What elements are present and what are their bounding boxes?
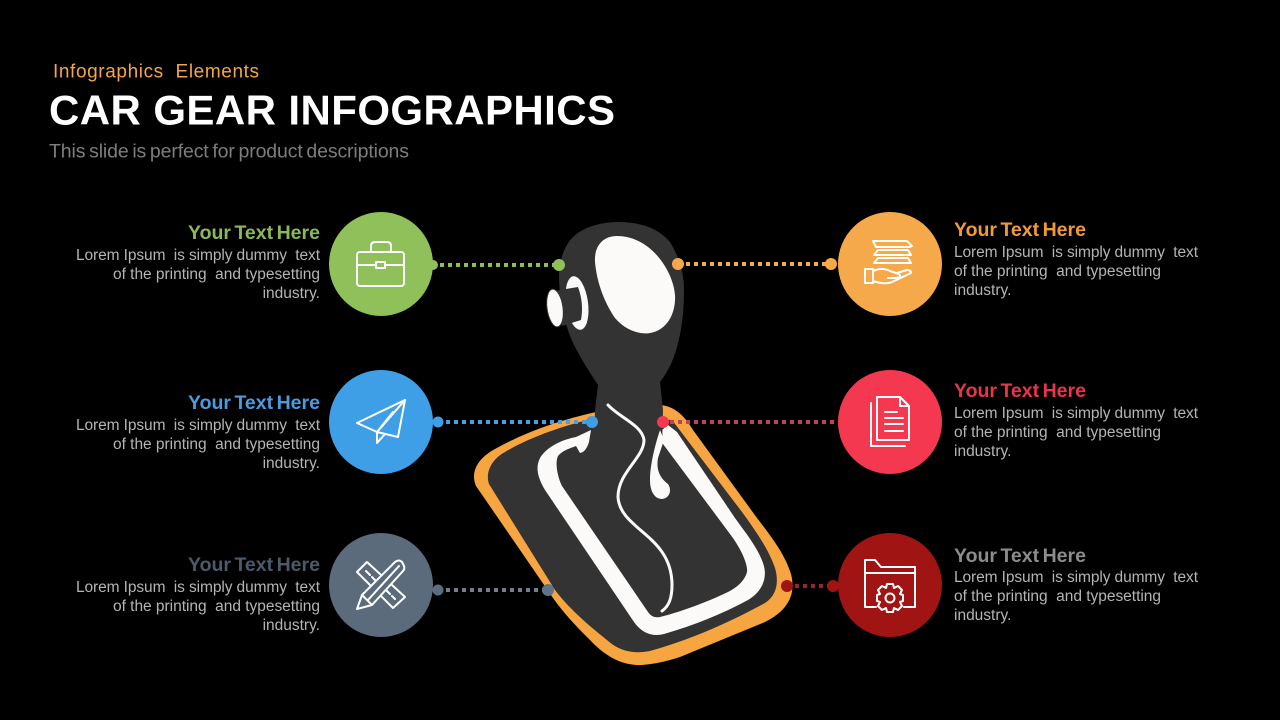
heading: Your Text Here xyxy=(188,392,320,414)
item: slate tools xyxy=(76,533,433,637)
body xyxy=(76,579,321,634)
side button face xyxy=(544,288,566,328)
circle xyxy=(838,212,942,316)
circle xyxy=(329,370,433,474)
item: orange hand xyxy=(838,212,1199,316)
body: industry. xyxy=(263,285,320,302)
icon: pencil and ruler xyxy=(357,560,405,609)
body xyxy=(76,417,321,472)
shifter base orange rim xyxy=(474,405,793,665)
subtitle: This slide is perfect for product descriptions xyxy=(49,140,409,162)
body xyxy=(954,569,1199,624)
heading: Your Text Here xyxy=(954,545,1086,567)
side button ring xyxy=(562,275,592,331)
body: industry. xyxy=(954,282,1011,299)
body: Lorem Ipsum is simply dummy text xyxy=(954,405,1199,422)
side button cap xyxy=(554,287,582,326)
circle xyxy=(329,212,433,316)
icon: briefcase xyxy=(357,242,404,286)
body xyxy=(954,405,1199,460)
gate serpentine line xyxy=(608,405,672,611)
body: of the printing and typesetting xyxy=(954,263,1161,280)
body: industry. xyxy=(954,607,1011,624)
header xyxy=(49,62,615,162)
body xyxy=(954,244,1199,299)
eyebrow: Infographics Elements xyxy=(53,62,259,82)
white gate track xyxy=(538,425,765,635)
heading: Your Text Here xyxy=(954,380,1086,402)
body: Lorem Ipsum is simply dummy text xyxy=(954,244,1199,261)
connector: dark red xyxy=(781,580,839,592)
shifter base dark plate xyxy=(488,418,777,652)
title: CAR GEAR INFOGRAPHICS xyxy=(49,86,615,134)
item: dark red folder xyxy=(838,533,1199,637)
body: of the printing and typesetting xyxy=(954,424,1161,441)
knob white highlight xyxy=(595,236,675,333)
heading: Your Text Here xyxy=(954,219,1086,241)
body: Lorem Ipsum is simply dummy text xyxy=(76,247,321,264)
gate drop shape xyxy=(650,430,670,499)
body: industry. xyxy=(954,443,1011,460)
body: of the printing and typesetting xyxy=(113,436,320,453)
body: Lorem Ipsum is simply dummy text xyxy=(954,569,1199,586)
connector: green xyxy=(428,259,565,271)
body xyxy=(76,247,321,302)
circle xyxy=(329,533,433,637)
icon: documents xyxy=(871,397,909,446)
connector: blue xyxy=(432,416,598,428)
icon: paper plane xyxy=(357,400,405,443)
circle xyxy=(838,533,942,637)
circle xyxy=(838,370,942,474)
item: green briefcase xyxy=(76,212,433,316)
body: of the printing and typesetting xyxy=(113,598,320,615)
item: red documents xyxy=(838,370,1199,474)
connector: orange xyxy=(672,258,837,270)
heading: Your Text Here xyxy=(188,222,320,244)
body: of the printing and typesetting xyxy=(954,588,1161,605)
connector: slate xyxy=(432,584,554,596)
connector: red xyxy=(657,416,838,428)
body: industry. xyxy=(263,617,320,634)
body: Lorem Ipsum is simply dummy text xyxy=(76,579,321,596)
gear shifter illustration xyxy=(474,222,793,665)
shifter stick and knob xyxy=(559,222,684,445)
heading: Your Text Here xyxy=(188,554,320,576)
body: of the printing and typesetting xyxy=(113,266,320,283)
item: blue paper plane xyxy=(76,370,433,474)
body: industry. xyxy=(263,455,320,472)
icon: hand with layers xyxy=(865,241,912,283)
body: Lorem Ipsum is simply dummy text xyxy=(76,417,321,434)
icon: folder with gear xyxy=(865,560,915,612)
